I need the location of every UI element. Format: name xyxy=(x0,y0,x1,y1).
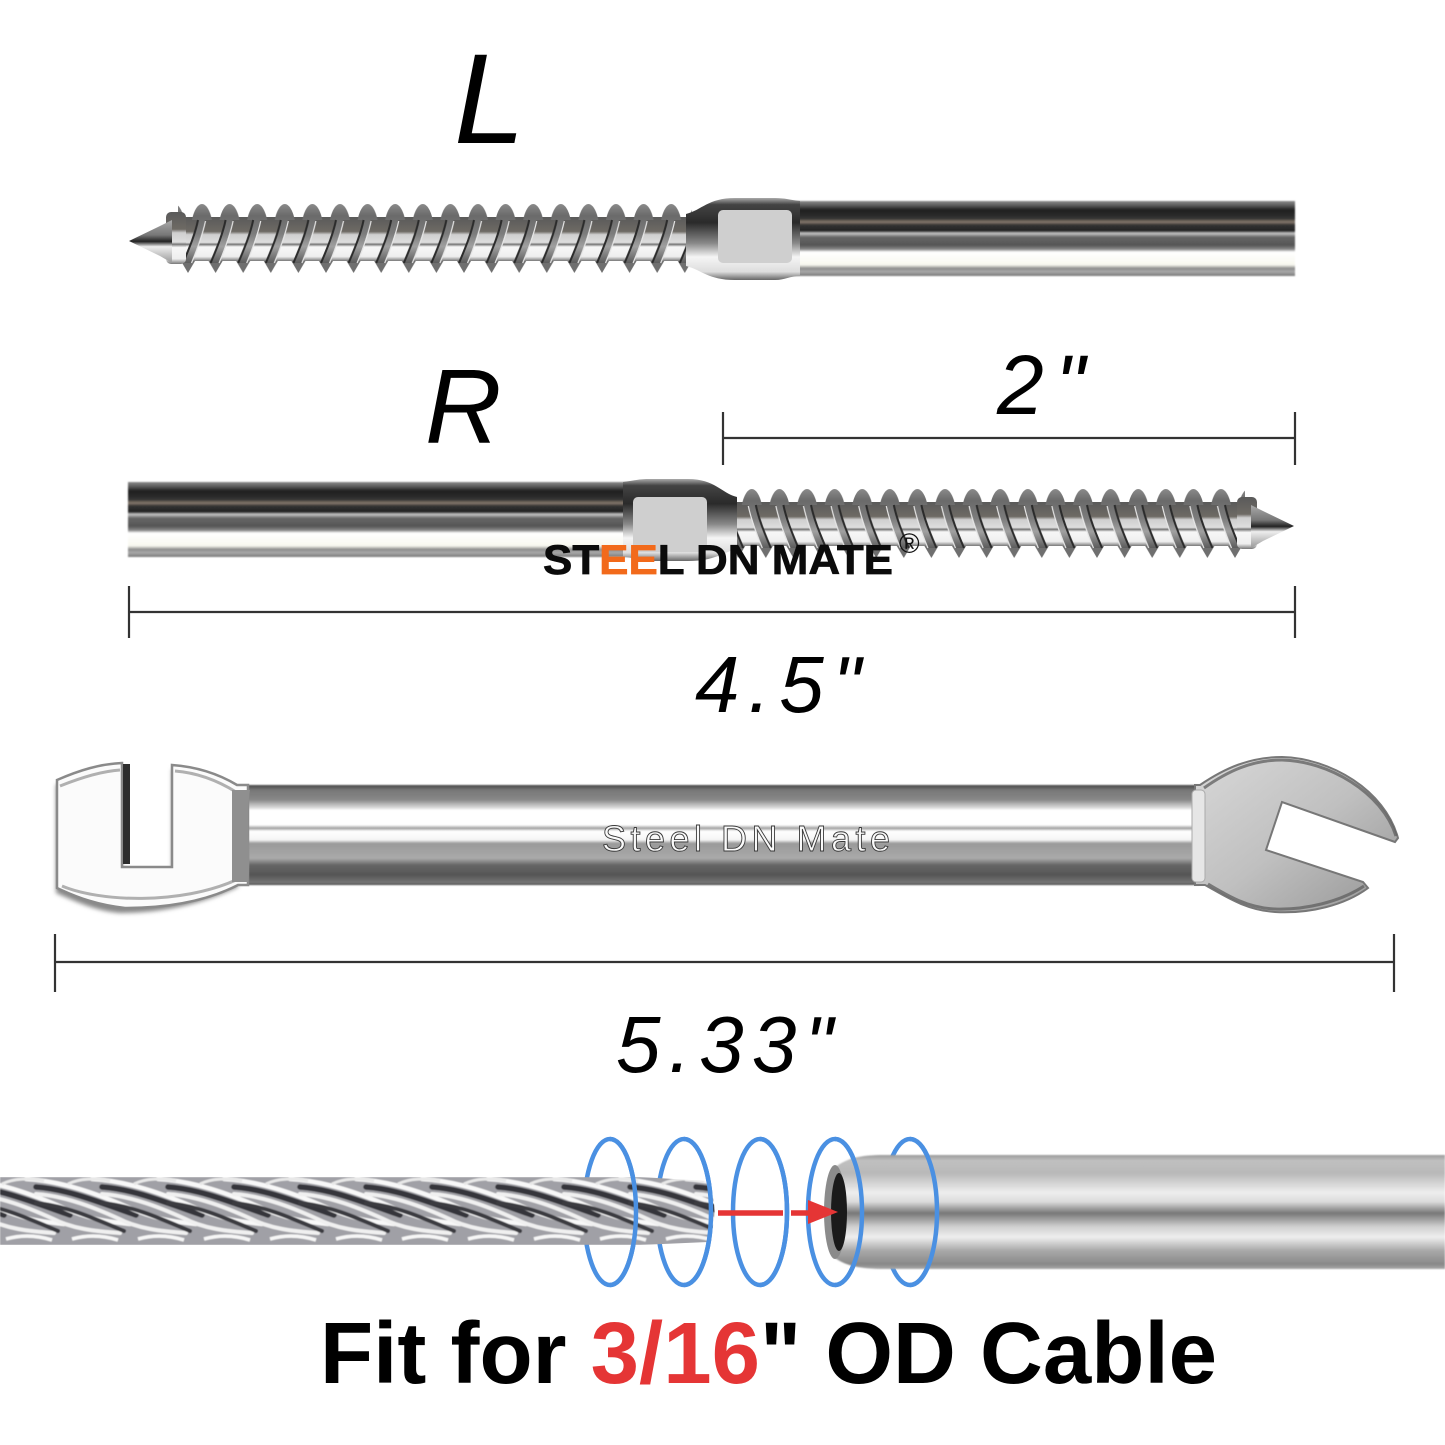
dimension: 4.5 inch: 4.5" xyxy=(695,640,865,729)
dimension: 2 inch xyxy=(723,338,1295,465)
screw tip xyxy=(129,220,172,263)
screw shoulder xyxy=(166,212,186,264)
dimension: 4.5 inch xyxy=(129,586,1295,729)
swaged collar xyxy=(623,479,737,561)
wrench shadow xyxy=(56,767,238,913)
fitting sleeve xyxy=(832,1155,1445,1269)
wire rope xyxy=(0,1177,722,1245)
screw thread xyxy=(731,488,1245,560)
right weld band xyxy=(1192,790,1205,882)
dimension: 5.33 inch: 5.33" xyxy=(616,1000,837,1089)
engraved brand text: Steel DN Mate xyxy=(602,818,890,859)
brand logo: STEEL DN MATE xyxy=(543,536,893,583)
head rim shading xyxy=(1204,760,1396,909)
slot inner shadow xyxy=(123,764,130,864)
screw tip xyxy=(1251,505,1294,548)
label: L: L xyxy=(454,28,525,171)
cylindrical barrel xyxy=(128,482,633,557)
U-slot head xyxy=(57,763,248,908)
open-end head xyxy=(1195,757,1398,912)
left-hand threaded fitting xyxy=(129,198,1295,280)
swaged collar xyxy=(686,198,800,280)
blue rings front xyxy=(610,1139,937,1285)
left weld band xyxy=(232,790,250,882)
wrench flat xyxy=(718,210,792,263)
cable fit illustration xyxy=(0,1139,1445,1285)
caption: Fit for 3/16" OD Cable xyxy=(320,1305,1217,1402)
sleeve rim xyxy=(824,1165,846,1259)
brand logo: ® xyxy=(899,528,920,559)
screw shoulder xyxy=(1237,497,1257,549)
dimension: 2 inch: 2" xyxy=(996,338,1088,432)
sleeve opening xyxy=(831,1173,847,1251)
red arrow line xyxy=(718,1210,813,1216)
right-hand threaded fitting xyxy=(128,479,1294,561)
spanner wrench xyxy=(56,757,1398,913)
dimension: 5.33 inch xyxy=(55,934,1394,1089)
blue rings back xyxy=(584,1139,937,1285)
screw thread xyxy=(178,203,692,275)
label: R: R xyxy=(425,348,502,466)
cylindrical barrel xyxy=(790,201,1295,276)
red arrow head xyxy=(808,1200,838,1224)
head bevel xyxy=(60,770,236,898)
shaft xyxy=(240,785,1200,885)
wrench flat xyxy=(633,497,707,552)
